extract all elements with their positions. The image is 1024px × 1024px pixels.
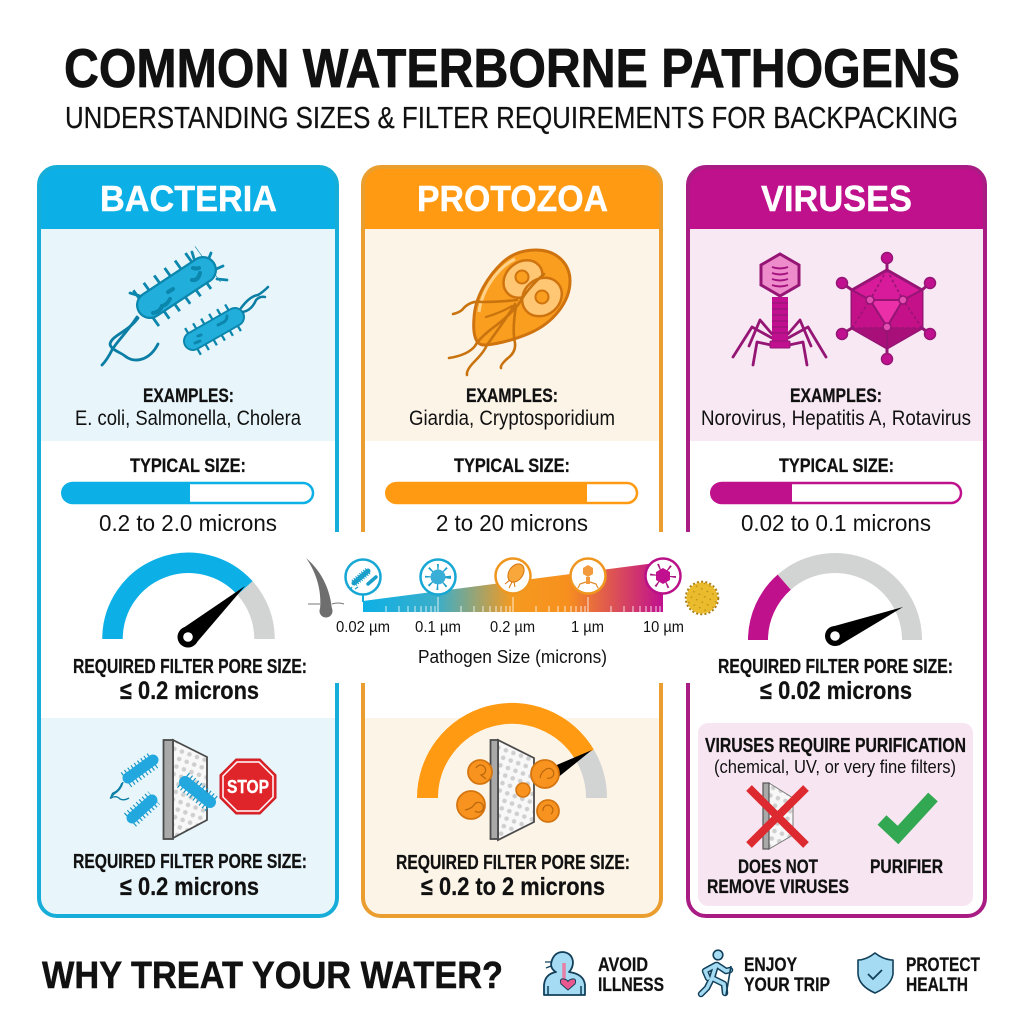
text: required pore size: REQUIRED FILTER PORE SIZE: [718, 656, 953, 678]
label: enjoy your trip: ENJOY [744, 955, 797, 976]
label: protect health: HEALTH [906, 975, 968, 996]
text: examples [701, 386, 971, 430]
icon: protozoa bubble [496, 558, 530, 594]
text: required pore size: ≤ 0.2 microns [120, 677, 259, 705]
label: avoid illness [598, 955, 664, 996]
typical size bar [710, 455, 961, 536]
text: examples [75, 386, 301, 430]
icon: bacteriophage [733, 254, 826, 365]
scale labels: 0.2 µm [490, 619, 535, 636]
callout: purification [698, 723, 973, 906]
icon: crossed filter [749, 783, 806, 849]
gauge: virus pore size [758, 563, 912, 646]
icon: stop sign: STOP [227, 777, 269, 797]
icon: stop sign [220, 759, 276, 814]
icon: filter stopping bacteria [110, 740, 212, 839]
gradient ramp [362, 562, 663, 612]
text: required pore size: ≤ 0.02 microns [760, 677, 912, 705]
icon: shield [858, 953, 893, 993]
panel: viruses [688, 167, 985, 916]
icon: virus bubble magenta [646, 558, 680, 594]
label: does not remove viruses: DOES NOT [738, 856, 818, 878]
scale labels: 0.1 µm [415, 619, 461, 636]
heading: protozoa: PROTOZOA [417, 178, 608, 219]
typical size bar: TYPICAL SIZE: [130, 455, 246, 477]
typical size bar: 2 to 20 microns [436, 510, 588, 536]
icon: phage bubble [570, 558, 606, 594]
scale labels: 0.02 µm [336, 619, 390, 636]
icon: green check [882, 797, 933, 835]
label: purifier: PURIFIER [870, 856, 943, 878]
timeline: pathogen size scale [306, 532, 718, 683]
text: required pore size lower [396, 852, 630, 901]
text: required pore size lower: REQUIRED FILTER PORE SIZE: [396, 852, 630, 874]
heading: bacteria: BACTERIA [100, 178, 277, 219]
icon: bacteria [102, 252, 268, 365]
icon: pollen grain [686, 582, 718, 614]
scale labels [336, 619, 684, 636]
scale labels: 10 µm [643, 619, 684, 636]
scale labels: 1 µm [571, 619, 604, 636]
label: protect health [906, 955, 980, 996]
text: examples [409, 386, 615, 430]
typical size bar [385, 455, 637, 536]
typical size bar: 0.02 to 0.1 microns [741, 510, 931, 536]
gauge: bacteria pore size [112, 563, 265, 648]
panel: bacteria [39, 167, 337, 916]
text: examples: E. coli, Salmonella, Cholera [75, 407, 301, 430]
icon: avoid illness [544, 952, 585, 995]
icon: icosahedral virus [836, 252, 936, 364]
axis label: Pathogen Size (microns) [418, 646, 607, 667]
gauge and filter: protozoa [427, 713, 596, 840]
typical size bar [61, 455, 313, 536]
icon: giardia [449, 250, 570, 375]
icon: virus bubble blue [420, 560, 456, 594]
typical size bar: 0.2 to 2.0 microns [99, 510, 277, 536]
text: required pore size lower: REQUIRED FILTER PORE SIZE: [73, 851, 307, 873]
label: avoid illness: ILLNESS [598, 975, 664, 996]
callout: purification: (chemical, UV, or very fine filters) [714, 756, 956, 777]
text: examples: Giardia, Cryptosporidium [409, 407, 615, 430]
label: enjoy your trip: YOUR TRIP [744, 975, 830, 996]
label: does not remove viruses [707, 856, 849, 898]
text: required pore size lower: ≤ 0.2 to 2 microns [421, 873, 605, 901]
typical size bar: TYPICAL SIZE: [779, 455, 894, 477]
heading: viruses: VIRUSES [761, 178, 912, 219]
text: required pore size lower: ≤ 0.2 microns [120, 873, 259, 901]
text: examples: Norovirus, Hepatitis A, Rotavirus [701, 407, 971, 430]
text: examples: EXAMPLES: [143, 386, 234, 407]
label: protect health: PROTECT [906, 955, 980, 976]
label: avoid illness: AVOID [598, 955, 648, 976]
icon: bacteria bubble [346, 560, 380, 594]
footer heading: WHY TREAT YOUR WATER? [42, 955, 503, 997]
label: enjoy your trip [744, 955, 830, 996]
text: required pore size [73, 656, 307, 705]
icon: hiker [701, 950, 731, 995]
text: examples: EXAMPLES: [466, 386, 558, 407]
text: examples: EXAMPLES: [790, 386, 882, 407]
label: does not remove viruses: REMOVE VIRUSES [707, 876, 849, 898]
panel: protozoa [363, 167, 661, 916]
icon: human hair [306, 558, 344, 618]
typical size bar: TYPICAL SIZE: [454, 455, 570, 477]
text: required pore size: REQUIRED FILTER PORE SIZE: [73, 656, 307, 678]
text: required pore size lower [73, 851, 307, 901]
text: required pore size [718, 656, 953, 705]
